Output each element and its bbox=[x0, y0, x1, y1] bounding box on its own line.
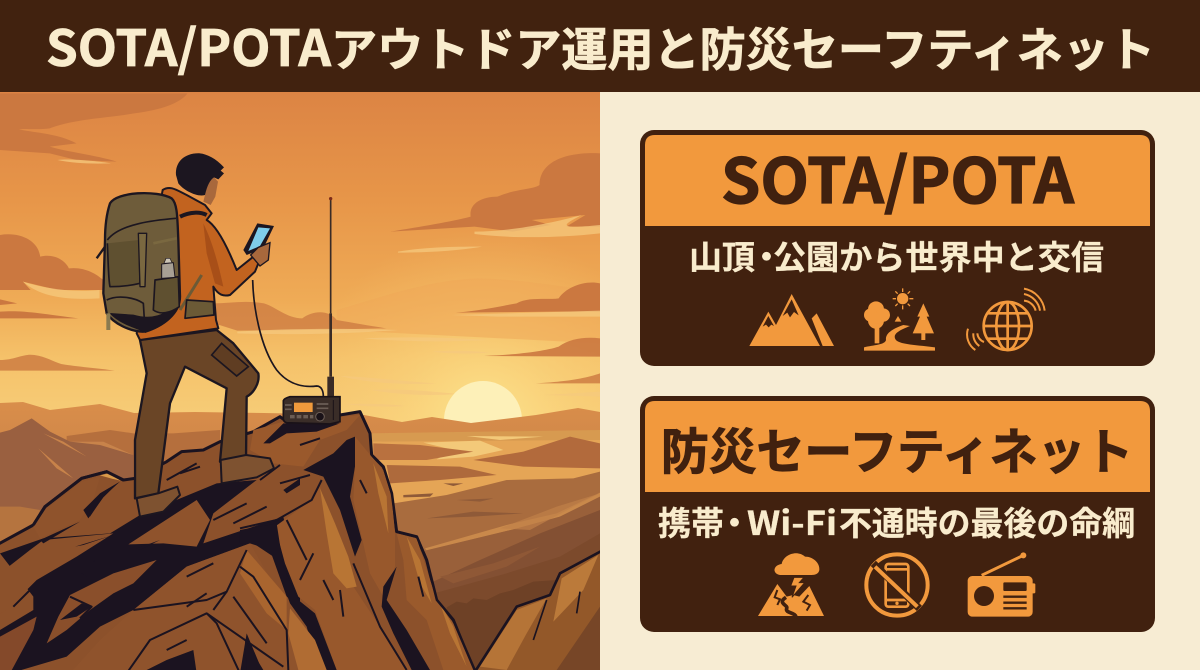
upper rock shadows bbox=[87, 482, 120, 517]
right face of the rock bbox=[240, 412, 475, 670]
sun glow bbox=[399, 273, 566, 419]
right foreground rock bbox=[475, 550, 603, 670]
icon: portable radio bbox=[968, 552, 1035, 617]
right valley bbox=[367, 430, 600, 670]
panel: SOTA/POTA bbox=[640, 130, 1155, 366]
panel subtitle: 携帯 bbox=[658, 497, 724, 545]
title text: アウトドア運用と防災セーフティネット bbox=[331, 14, 1155, 80]
icon: phone prohibited bbox=[866, 554, 928, 616]
phone cable bbox=[253, 280, 323, 396]
panel subtitle: ・ bbox=[750, 231, 783, 279]
distant mountains and valley bbox=[0, 402, 600, 670]
page background bbox=[600, 92, 1200, 670]
panel subtitle: 公園から世界中と交信 bbox=[773, 231, 1104, 279]
portable radio bbox=[283, 397, 340, 424]
sun bbox=[444, 381, 522, 423]
backpack bbox=[97, 193, 214, 333]
icon: globe with radio waves bbox=[967, 289, 1045, 350]
antenna bbox=[329, 197, 332, 397]
icon row: disaster, no phone, radio bbox=[758, 552, 1035, 618]
panel heading: SOTA/POTA bbox=[721, 131, 1074, 221]
jacket bbox=[137, 188, 258, 340]
hiker, radio and antenna bbox=[97, 153, 340, 517]
summit rock formation bbox=[0, 412, 475, 670]
icon: mountains bbox=[749, 294, 834, 346]
panel subtitle: 山頂 bbox=[689, 231, 755, 279]
boots bbox=[137, 455, 274, 517]
icon: storm and cracked mountain bbox=[758, 553, 824, 618]
panel subtitle: Wi-Fi bbox=[747, 497, 837, 545]
cargo pocket bbox=[212, 343, 248, 376]
panel subtitle: ・ bbox=[718, 497, 751, 545]
icon row: mountain, park, globe bbox=[749, 288, 1045, 351]
title text: SOTA/POTA bbox=[46, 9, 332, 81]
left backdrop bbox=[0, 418, 220, 550]
panel heading: 防災セーフティネット bbox=[661, 413, 1133, 484]
title bar bbox=[0, 0, 1200, 92]
smartphone and hand bbox=[243, 223, 274, 266]
rock shadows, left bbox=[0, 480, 300, 670]
panel subtitle: 不通時の最後の命綱 bbox=[839, 497, 1135, 545]
illustration: hiker operating a radio on a summit at sunset bbox=[0, 92, 600, 670]
clouds bbox=[0, 93, 600, 407]
icon: park with tree and river bbox=[864, 288, 935, 351]
head bbox=[176, 153, 224, 205]
panel: disaster safety net bbox=[640, 396, 1155, 632]
sunset sky bbox=[0, 92, 600, 422]
trousers bbox=[135, 330, 259, 498]
